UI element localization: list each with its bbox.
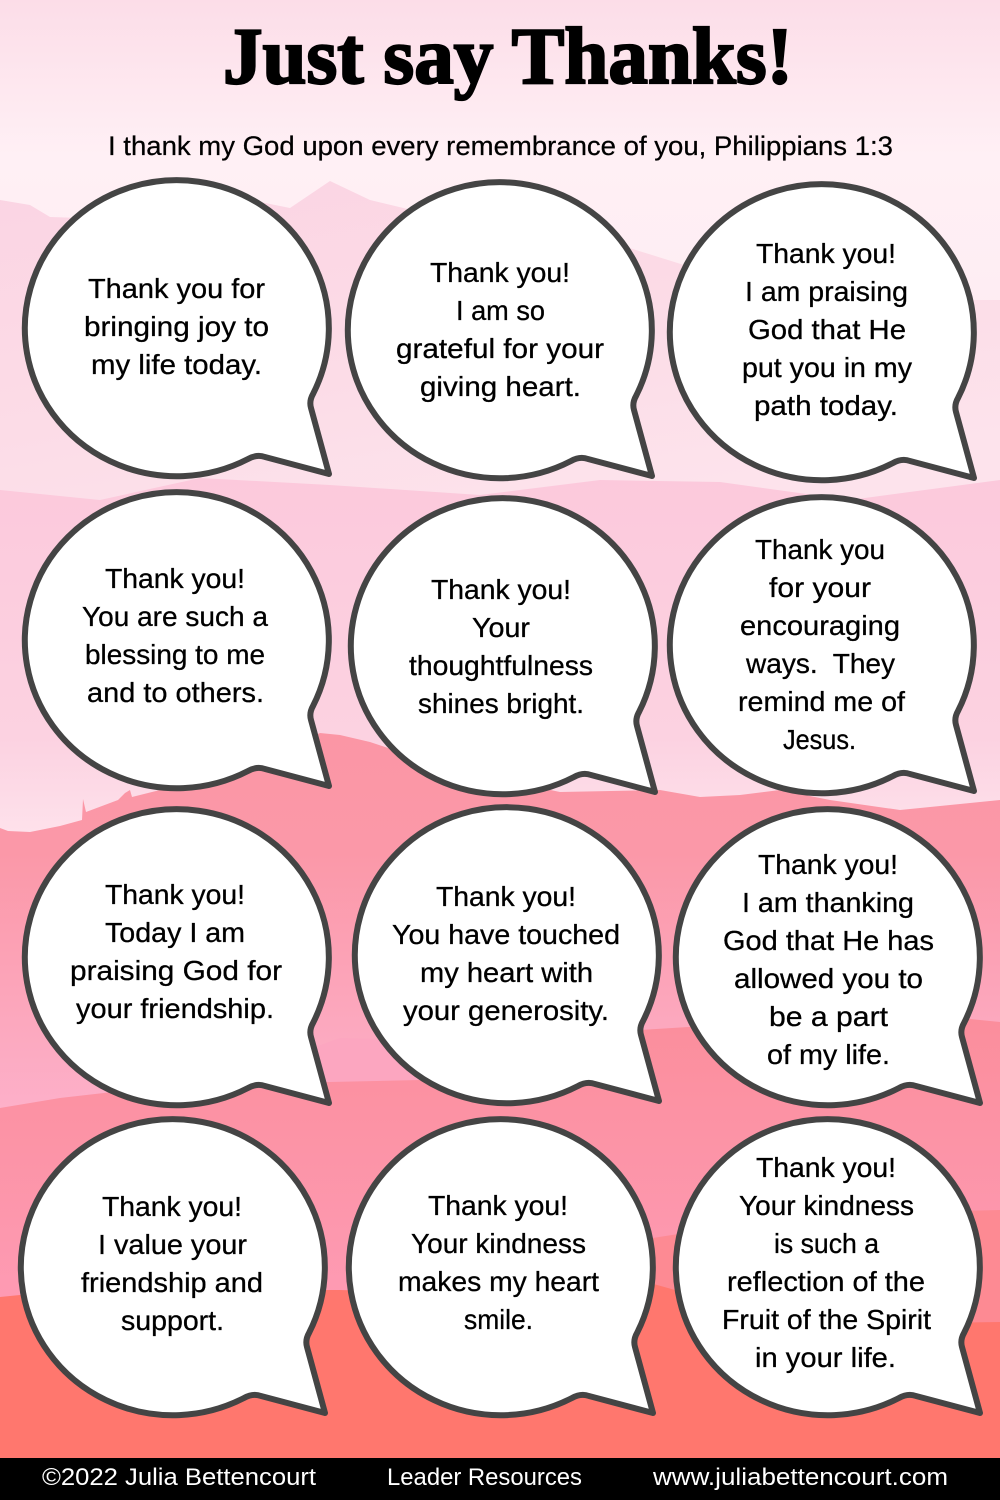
bubble outline — [348, 182, 652, 478]
speech bubble 6 — [670, 497, 974, 793]
footer bar — [0, 1458, 1000, 1500]
bubble message: praising God for — [70, 955, 282, 986]
bubble message: support. — [121, 1305, 224, 1336]
bubble message: Thank you! — [430, 257, 570, 288]
bubble message: Jesus. — [783, 724, 856, 755]
speech bubble 2 — [348, 182, 652, 478]
bubble message: Your kindness — [739, 1190, 914, 1221]
bubble message: in your life. — [755, 1342, 896, 1373]
bubble message: grateful for your — [396, 333, 604, 364]
bubble message: Thank you! — [102, 1191, 242, 1222]
bubble message — [70, 879, 282, 1024]
bubble outline — [351, 498, 655, 794]
bubble outline — [25, 180, 329, 476]
bubble message: shines bright. — [418, 688, 584, 719]
bubble message — [82, 563, 268, 708]
bubble message: blessing to me — [85, 639, 265, 670]
bubble message — [723, 849, 934, 1070]
bubble message: Thank you — [755, 534, 885, 565]
bubble message: for your — [769, 572, 871, 603]
bubble message: I am so — [456, 295, 545, 326]
bubble outline — [355, 807, 659, 1103]
bubble message: be a part — [769, 1001, 888, 1032]
bubble message: bringing joy to — [84, 311, 269, 342]
bubble message: giving heart. — [420, 371, 581, 402]
bubble message: Thank you! — [756, 1152, 896, 1183]
bubble message — [722, 1152, 931, 1373]
bubble message: Thank you! — [756, 238, 896, 269]
bubble message: Your — [472, 612, 530, 643]
bubble message: Thank you for — [88, 273, 265, 304]
bubble message: God that He — [748, 314, 906, 345]
bubble outline — [676, 809, 980, 1105]
bubble message: of my life. — [767, 1039, 890, 1070]
footer center label: Leader Resources — [387, 1464, 582, 1491]
bubble message: Thank you! — [428, 1190, 568, 1221]
speech bubble 1 — [25, 180, 329, 476]
speech bubble 8 — [355, 807, 659, 1103]
bubble message: ways. They — [745, 648, 895, 679]
bubble message: thoughtfulness — [409, 650, 593, 681]
bubble message: allowed you to — [734, 963, 923, 994]
bubble message: is such a — [774, 1228, 879, 1259]
bubble message — [392, 881, 620, 1026]
footer copyright: ©2022 Julia Bettencourt — [42, 1464, 316, 1491]
bubble outline — [21, 1119, 325, 1415]
bubble message: your generosity. — [403, 995, 609, 1026]
bubble message: God that He has — [723, 925, 934, 956]
bubble message: I am praising — [745, 276, 908, 307]
bubble outline — [25, 809, 329, 1105]
speech bubble 12 — [676, 1119, 980, 1415]
bubble message: Thank you! — [105, 563, 245, 594]
bubble message — [742, 238, 912, 421]
speech bubble 10 — [21, 1119, 325, 1415]
bubble outline — [670, 184, 974, 480]
bubble message: Thank you! — [431, 574, 571, 605]
bubble message: my life today. — [91, 349, 262, 380]
bubble message: reflection of the — [727, 1266, 925, 1297]
bubble message: You are such a — [82, 601, 268, 632]
speech bubble 9 — [676, 809, 980, 1105]
bubble message: Thank you! — [105, 879, 245, 910]
bubble outline — [670, 497, 974, 793]
bubble outline — [349, 1119, 653, 1415]
bubble message: path today. — [754, 390, 898, 421]
bubble message: Fruit of the Spirit — [722, 1304, 931, 1335]
speech bubble 7 — [25, 809, 329, 1105]
footer website: www.juliabettencourt.com — [652, 1464, 948, 1491]
title: Just say Thanks! — [223, 13, 793, 101]
bubble message: You have touched — [392, 919, 620, 950]
bubble message: makes my heart — [398, 1266, 599, 1297]
bubble message: Thank you! — [436, 881, 576, 912]
bubble message: Your kindness — [411, 1228, 586, 1259]
bubble message: put you in my — [742, 352, 912, 383]
bubble outline — [25, 492, 329, 788]
bubble outline — [676, 1119, 980, 1415]
bubble message: and to others. — [87, 677, 264, 708]
bubble message: Today I am — [105, 917, 245, 948]
bubble message: friendship and — [81, 1267, 263, 1298]
bubble message: encouraging — [740, 610, 900, 641]
bubble message: smile. — [464, 1304, 533, 1335]
bubble message: I value your — [98, 1229, 247, 1260]
speech bubble 11 — [349, 1119, 653, 1415]
bubble message: remind me of — [738, 686, 905, 717]
bubble message — [398, 1190, 599, 1335]
bubble message — [396, 257, 604, 402]
bubble message — [81, 1191, 263, 1336]
bubble message — [84, 273, 269, 380]
subtitle: Bible verse: I thank my God upon every remembrance of you, Philippians 1:3 — [108, 131, 893, 161]
speech bubble 3 — [670, 184, 974, 480]
bubble message — [738, 534, 905, 755]
speech bubble 5 — [351, 498, 655, 794]
bubble message: Thank you! — [758, 849, 898, 880]
bubble message: your friendship. — [76, 993, 274, 1024]
bubble message — [409, 574, 593, 719]
bubble message: my heart with — [420, 957, 593, 988]
speech bubble 4 — [25, 492, 329, 788]
bubble message: I am thanking — [742, 887, 914, 918]
